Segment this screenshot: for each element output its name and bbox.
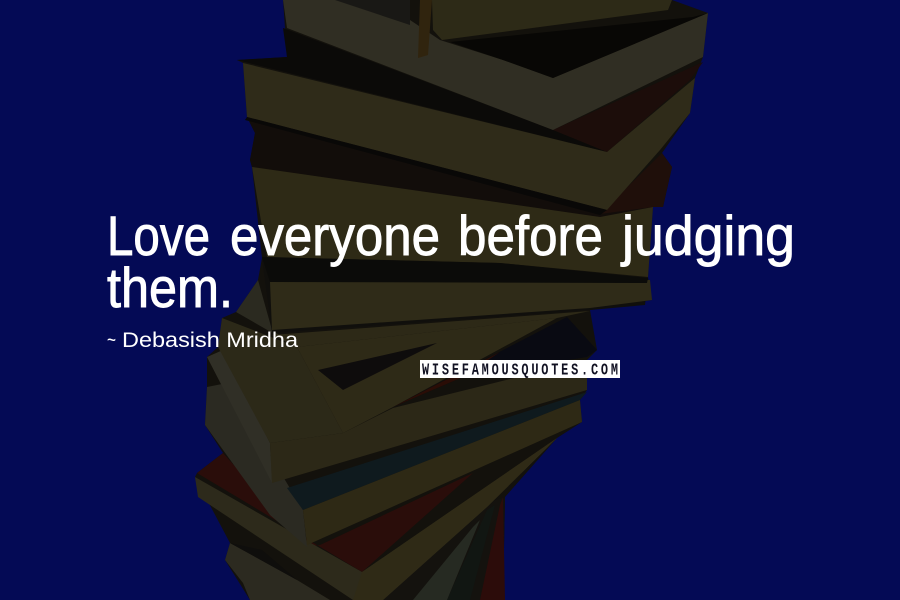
book: band at title height xyxy=(262,258,652,347)
title: quote: everyone xyxy=(230,204,440,267)
book: fan of pages mid stack xyxy=(218,280,557,443)
title: quote: Love xyxy=(107,204,210,267)
book: lower left red cover xyxy=(195,438,557,600)
book: third from top xyxy=(237,28,703,215)
title: quote: before xyxy=(458,204,603,267)
watermark: wisefamousquotes badge: WISEFAMOUSQUOTES.COM xyxy=(422,362,618,380)
title: quote: them. xyxy=(107,256,233,319)
attribution: author: Debasish Mridha xyxy=(122,329,298,352)
title: quote: judging xyxy=(620,204,795,267)
book: second from top xyxy=(283,0,708,130)
book: lower stack xyxy=(205,317,597,547)
book: large spine under the title xyxy=(247,117,672,283)
title: quote xyxy=(107,204,795,319)
attribution: author: ~ xyxy=(107,329,116,352)
stack silhouette xyxy=(195,0,708,600)
illustration: stack of books xyxy=(195,0,708,600)
book: bottom spines xyxy=(225,497,505,600)
book: top cover xyxy=(335,0,672,40)
